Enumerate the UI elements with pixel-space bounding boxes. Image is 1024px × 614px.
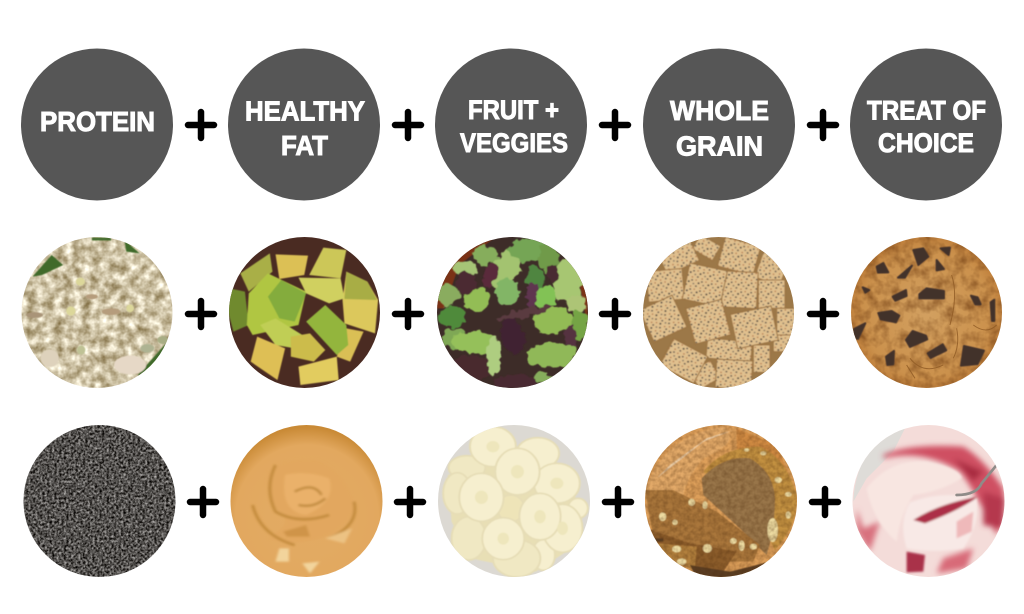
plus sign [605,489,631,515]
badge: healthy fat [228,48,380,200]
badge: treat of choice [850,48,1002,200]
badge: whole grain: GRAIN [676,130,763,162]
badge: treat of choice: TREAT OF [867,96,986,126]
badge: fruit + veggies: VEGGIES [460,128,568,158]
badge: treat of choice: CHOICE [878,128,974,158]
badge: whole grain [643,48,795,200]
plus sign [602,301,628,327]
plus sign [810,301,836,327]
badge: fruit + veggies [435,48,587,200]
photo: avocado chunks [228,236,382,390]
plus sign [395,112,421,138]
photo: tuna salad [21,237,173,389]
row 1: category badges [21,48,1002,200]
badge: protein: PROTEIN [40,106,155,137]
plus sign [810,112,836,138]
photo: mixed greens salad [436,236,590,390]
photo: banana slices [437,424,591,578]
photo: berry yogurt [852,424,1006,578]
badge: fruit + veggies: FRUIT + [468,95,559,125]
row 3: second food example set [23,424,1006,578]
photo: seeded crackers [639,234,797,390]
photo: whole grain bread [643,424,798,578]
badge: protein [21,48,173,200]
badge: healthy fat: HEALTHY [245,96,365,126]
badge: whole grain: WHOLE [670,95,769,126]
plus sign [812,489,838,515]
photo: chia seeds [23,424,177,578]
badge: healthy fat: FAT [281,130,328,161]
plus sign [190,489,216,515]
plus sign [397,489,423,515]
photo: chocolate chip cookie [850,236,1004,390]
plus sign [188,301,214,327]
plus sign [395,301,421,327]
photo: peanut butter [230,424,384,578]
plus sign [602,112,628,138]
row 2: first food example set [21,234,1004,390]
plus sign [188,112,214,138]
